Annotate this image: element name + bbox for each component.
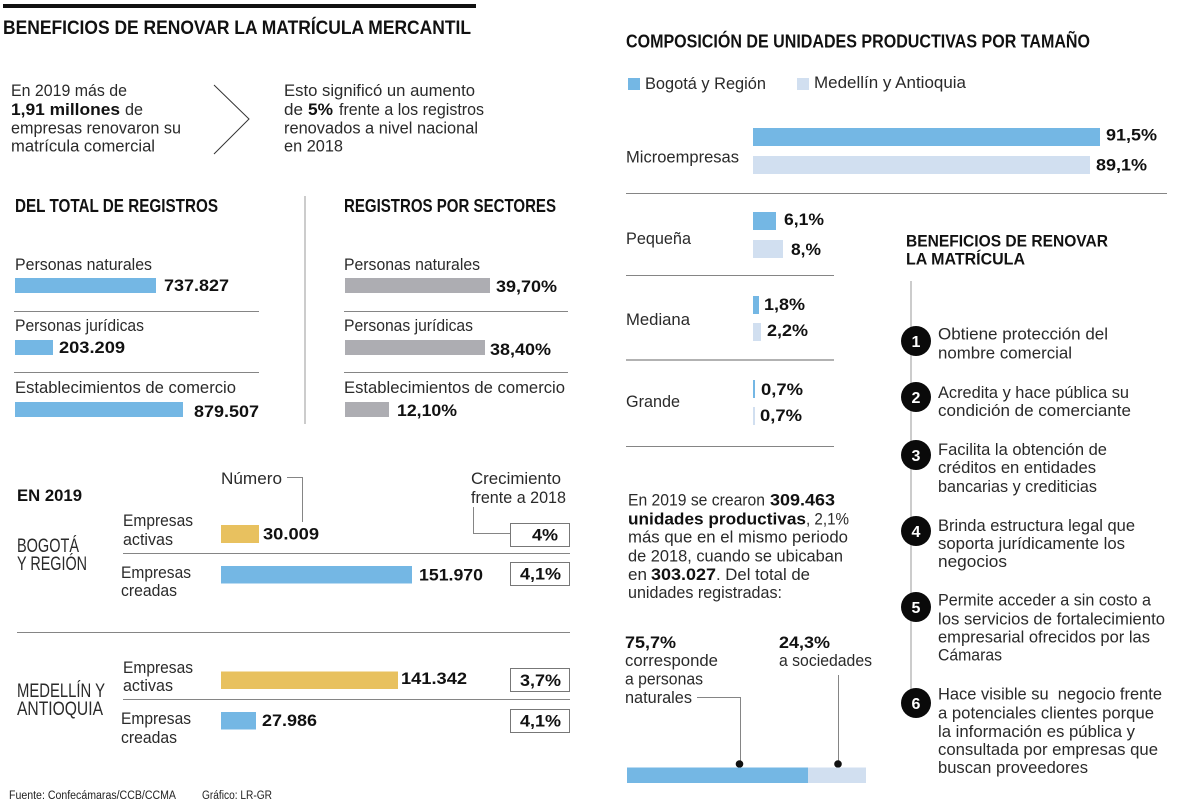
callout: 24,3%: 24,3% — [779, 633, 830, 652]
row: establecimientos de comercio: 879.507 — [194, 402, 259, 421]
row: Medellín creadas: 4,1% — [520, 712, 561, 730]
row: personas jurídicas — [15, 316, 144, 357]
intro text: 5% increase: 5% — [308, 100, 333, 119]
benefit 4: 4 — [912, 524, 921, 541]
row: personas naturales: 39,70% — [496, 277, 557, 296]
row: Medellín activas: Empresas — [123, 658, 193, 677]
benefit 6: consultada por empresas que — [938, 740, 1158, 759]
row: Bogotá activas: activas — [123, 530, 173, 549]
callout: 24,3%: a sociedades — [779, 651, 872, 670]
row: pequeña — [626, 210, 824, 259]
region label: Medellín: MEDELLÍN Y — [17, 681, 105, 702]
intro text: 1,91 millones: empresas renovaron su — [11, 118, 181, 138]
intro text: 5% increase: renovados a nivel nacional — [284, 118, 478, 138]
benefit 1 — [901, 324, 1108, 362]
benefit 3: créditos en entidades — [938, 458, 1096, 477]
heading: BENEFICIOS DE RENOVAR — [906, 232, 1108, 250]
benefit 5 — [901, 590, 1165, 664]
row: Medellín creadas: creadas — [121, 728, 177, 747]
row: mediana: Mediana — [626, 310, 691, 329]
callout: 75,7%: naturales — [625, 688, 692, 707]
benefit 3: Facilita la obtención de — [938, 440, 1107, 459]
footer: source and credit: Fuente: Confecámaras/CCB/CCMA — [9, 790, 176, 802]
region label: Bogotá — [17, 536, 87, 575]
callout: 75,7% — [625, 633, 743, 768]
legend: número: Número — [221, 469, 282, 488]
intro text: 1,91 millones: 1,91 millones — [11, 100, 120, 119]
benefit 2: Acredita y hace pública su — [938, 383, 1129, 402]
benefit 6 — [901, 684, 1162, 777]
row: personas naturales — [344, 255, 557, 296]
callout: 75,7%: 75,7% — [625, 633, 676, 652]
row: Medellín creadas: Empresas — [121, 709, 191, 728]
text block: 309.463 unidades productivas: unidades registradas: — [628, 583, 782, 602]
row: pequeña: Pequeña — [626, 229, 692, 248]
row: personas naturales: Personas naturales — [15, 255, 152, 274]
benefit 5: 5 — [912, 600, 921, 617]
callout: 75,7%: corresponde — [625, 651, 718, 670]
row: microempresas — [626, 126, 1157, 174]
row: Medellín activas: activas — [123, 676, 173, 695]
row: personas naturales — [15, 255, 229, 295]
heading: EN 2019 — [17, 486, 82, 505]
row: grande: Grande — [626, 392, 680, 411]
intro text: 1,91 millones: de — [125, 100, 143, 119]
benefit 4: Brinda estructura legal que — [938, 516, 1135, 535]
row: personas jurídicas: Personas jurídicas — [344, 316, 473, 335]
row: Bogotá creadas: 4,1% — [520, 564, 561, 584]
intro text: 5% increase: frente a los registros — [339, 100, 484, 119]
row: Bogotá activas — [123, 511, 570, 549]
legend: crecimiento: frente a 2018 — [471, 488, 566, 507]
region label: Bogotá: BOGOTÁ — [17, 536, 79, 557]
benefit 5: Permite acceder a sin costo a — [938, 590, 1152, 610]
legend: crecimiento — [471, 469, 566, 534]
callout: 75,7%: a personas — [625, 670, 703, 688]
benefit 3: bancarias y crediticias — [938, 477, 1097, 496]
legend: Bogotá y Región — [645, 74, 766, 93]
benefit 6: Hace visible su negocio frente — [938, 684, 1162, 704]
row: pequeña: 8,% — [791, 240, 821, 259]
row: grande: 0,7% — [760, 406, 802, 425]
footer: source and credit: Gráfico: LR-GR — [202, 790, 272, 802]
row: establecimientos de comercio — [15, 378, 259, 421]
benefit 5: empresarial ofrecidos por las — [938, 628, 1150, 646]
row: Bogotá creadas — [121, 562, 570, 600]
heading: LA MATRÍCULA — [906, 250, 1025, 268]
row: Bogotá creadas: creadas — [121, 581, 177, 600]
legend: crecimiento: Crecimiento — [471, 469, 561, 488]
heading: REGISTROS POR SECTORES — [344, 196, 556, 216]
row: mediana: 1,8% — [764, 295, 805, 314]
intro text: 5% increase: en 2018 — [284, 136, 343, 156]
row: establecimientos de comercio — [344, 378, 565, 420]
text block: 309.463 unidades productivas: más que en el mismo periodo — [628, 528, 848, 546]
benefit 4: soporta jurídicamente los — [938, 534, 1125, 553]
intro text: 5% increase: Esto significó un aumento — [284, 81, 475, 100]
benefit 4: negocios — [938, 552, 1007, 571]
panel: composición por tamaño — [626, 30, 1167, 446]
footer: source and credit — [9, 790, 272, 802]
row: Bogotá activas: 30.009 — [263, 524, 319, 544]
benefit 5: los servicios de fortalecimiento — [938, 610, 1165, 628]
text block: 309.463 unidades productivas: 303.027 — [651, 565, 716, 584]
intro text: 1,91 millones: matrícula comercial — [11, 136, 155, 156]
benefit 3: 3 — [912, 448, 921, 465]
panel: registros por sectores — [344, 196, 568, 420]
bar segments — [627, 768, 866, 783]
benefit 6: buscan proveedores — [938, 758, 1088, 777]
row: personas jurídicas — [344, 316, 551, 359]
heading: COMPOSICIÓN DE UNIDADES PRODUCTIVAS POR TAMAÑO — [626, 30, 1090, 52]
text block: 309.463 unidades productivas: En 2019 se crearon — [628, 490, 765, 510]
intro text: 1,91 millones — [11, 81, 181, 156]
callout: 24,3% — [779, 633, 872, 768]
benefit 2: 2 — [912, 390, 921, 407]
benefit 2: condición de comerciante — [938, 401, 1131, 420]
text block: 309.463 unidades productivas: . Del total de — [716, 565, 810, 584]
benefit 4 — [901, 516, 1135, 571]
row: Bogotá activas: Empresas — [123, 511, 193, 530]
benefit 6: a potenciales clientes porque — [938, 704, 1154, 722]
text block: 309.463 unidades productivas — [628, 490, 849, 602]
row: establecimientos de comercio: 12,10% — [397, 401, 457, 420]
row: grande — [626, 380, 803, 425]
benefit 5: Cámaras — [938, 646, 1002, 664]
row: Bogotá creadas: Empresas — [121, 563, 191, 582]
row: Medellín activas: 141.342 — [401, 669, 467, 688]
row: microempresas: 91,5% — [1106, 126, 1157, 144]
row: establecimientos de comercio: Establecimientos de comercio — [15, 378, 236, 397]
text block: 309.463 unidades productivas: de 2018, cuando se ubicaban — [628, 546, 843, 566]
benefit 6: 6 — [912, 696, 921, 713]
legend: Medellín y Antioquia — [814, 73, 967, 92]
row: Medellín activas: 3,7% — [520, 671, 561, 690]
row: microempresas: 89,1% — [1096, 156, 1147, 174]
row: pequeña: 6,1% — [784, 210, 824, 229]
region label: Medellín: ANTIOQUIA — [17, 699, 103, 720]
row: Medellín creadas: 27.986 — [262, 711, 317, 730]
region label: Medellín — [17, 681, 105, 720]
row: Medellín activas — [123, 658, 570, 695]
benefit 2 — [901, 382, 1131, 420]
row: Bogotá creadas: 151.970 — [419, 566, 483, 584]
benefit 3 — [901, 440, 1107, 496]
row: personas naturales: Personas naturales — [344, 255, 480, 274]
row: Medellín creadas — [121, 709, 570, 747]
heading — [906, 232, 1108, 268]
region label: Bogotá: Y REGIÓN — [17, 553, 87, 575]
text block: 309.463 unidades productivas: en — [628, 565, 647, 584]
row: mediana — [626, 295, 808, 341]
row: microempresas: Microempresas — [626, 148, 739, 166]
row: grande: 0,7% — [761, 380, 803, 399]
row: Bogotá activas: 4% — [532, 526, 558, 544]
panel: en 2019 — [17, 469, 570, 747]
panel: beneficios de renovar la matrícula — [901, 232, 1165, 777]
text block: 309.463 unidades productivas: unidades productivas — [628, 510, 806, 528]
row: establecimientos de comercio: Establecimientos de comercio — [344, 378, 565, 397]
row: personas jurídicas: 38,40% — [490, 340, 551, 359]
benefit 6: la información es pública y — [938, 722, 1135, 741]
row: personas jurídicas: 203.209 — [59, 338, 125, 357]
heading: DEL TOTAL DE REGISTROS — [15, 196, 218, 216]
benefit 1: nombre comercial — [938, 344, 1072, 362]
text block: 309.463 unidades productivas: , 2,1% — [806, 510, 849, 528]
row: personas jurídicas: Personas jurídicas — [15, 316, 144, 335]
intro text: 5% increase — [284, 81, 484, 156]
icon: chevron arrow — [214, 85, 249, 154]
top rule — [3, 4, 476, 8]
row: personas naturales: 737.827 — [164, 276, 229, 295]
legend: número — [221, 469, 302, 522]
intro text: 1,91 millones: En 2019 más de — [11, 81, 127, 100]
benefit 1: 1 — [912, 334, 921, 351]
text block: 309.463 unidades productivas: 309.463 — [770, 490, 835, 510]
row: mediana: 2,2% — [767, 321, 808, 340]
stacked bar chart: personas naturales vs sociedades — [625, 633, 872, 783]
intro text: 5% increase: de — [284, 100, 303, 119]
legend — [628, 73, 967, 93]
title: BENEFICIOS DE RENOVAR LA MATRÍCULA MERCANTIL — [3, 16, 471, 39]
panel: del total de registros — [14, 196, 259, 421]
benefit 1: Obtiene protección del — [938, 324, 1108, 344]
